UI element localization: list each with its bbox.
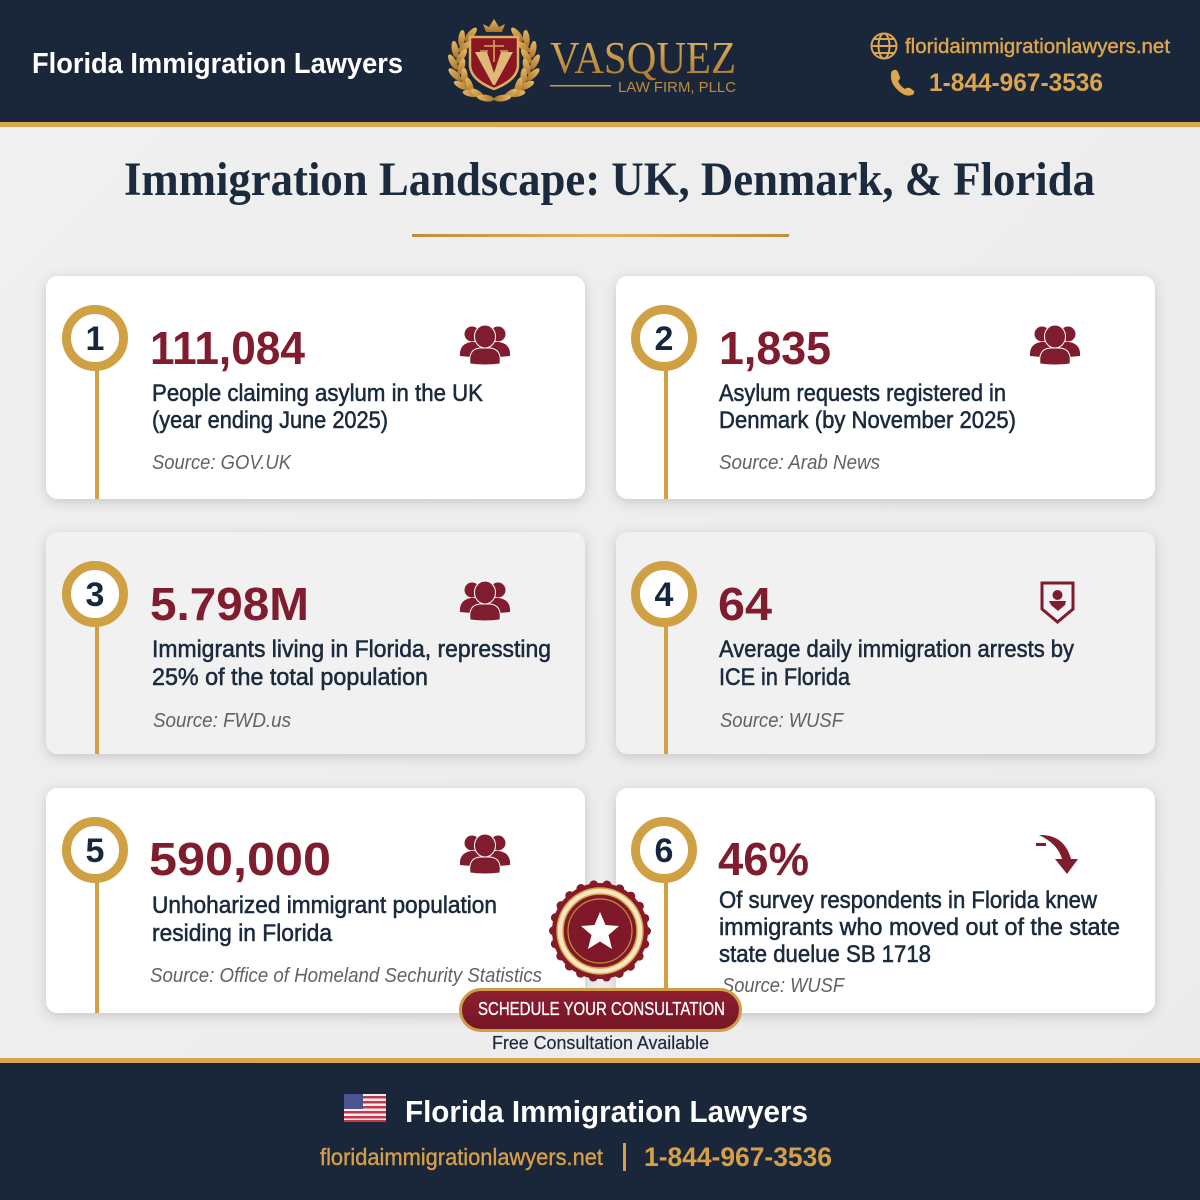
number badge 1: 1	[86, 320, 104, 358]
logo	[446, 19, 736, 103]
icon: star	[581, 912, 619, 949]
button caption: Free Consultation Available	[492, 1033, 709, 1053]
footer band	[0, 1058, 1200, 1200]
panel: stat 1	[46, 276, 585, 499]
panel: stat 2	[616, 276, 1155, 499]
panel: stat 5	[46, 788, 585, 1013]
description: Unhoharized immigrant population	[152, 892, 497, 919]
number badge 3	[66, 566, 124, 622]
number badge 5	[66, 822, 124, 878]
crown	[483, 19, 505, 32]
description: Average daily immigration arrests by	[719, 636, 1074, 663]
description: Denmark (by November 2025)	[719, 407, 1016, 434]
description: Asylum requests registered in	[719, 380, 1006, 407]
description	[152, 892, 497, 947]
description: ICE in Florida	[719, 664, 851, 691]
icon: people	[460, 581, 510, 621]
description	[719, 380, 1016, 434]
wordmark rule	[550, 85, 611, 86]
value: 590,000	[149, 833, 331, 885]
title: Immigration Landscape: UK, Denmark, & Florida	[124, 153, 1095, 206]
value: 46%	[718, 833, 809, 885]
number badge 5: 5	[86, 832, 104, 870]
icon: US flag	[344, 1094, 386, 1122]
button label: SCHEDULE YOUR CONSULTATION	[478, 999, 725, 1019]
source: Source: WUSF	[720, 710, 845, 732]
source: Source: Arab News	[719, 452, 880, 474]
footer firm name: Florida Immigration Lawyers	[405, 1094, 808, 1129]
wordmark subline: LAW FIRM, PLLC	[618, 80, 736, 96]
description: Immigrants living in Florida, repressting	[152, 636, 551, 663]
call to action button	[460, 990, 740, 1030]
icon: people	[1030, 325, 1080, 365]
description	[152, 380, 483, 434]
description: residing in Florida	[152, 920, 333, 947]
header website: floridaimmigrationlawyers.net	[905, 36, 1170, 58]
description: People claiming asylum in the UK	[152, 380, 483, 407]
footer phone: 1-844-967-3536	[644, 1142, 832, 1172]
number badge 6	[636, 822, 692, 878]
value: 1,835	[719, 322, 831, 374]
header firm name: Florida Immigration Lawyers	[32, 48, 403, 80]
description: 25% of the total population	[152, 664, 428, 691]
shield	[470, 37, 518, 89]
source: Source: Office of Homeland Sechurity Statistics	[150, 965, 542, 987]
panel: stat 4	[616, 532, 1155, 754]
icon: people	[460, 325, 510, 365]
number badge 2: 2	[655, 320, 673, 358]
icon: down arrow	[1036, 835, 1078, 874]
shield scales	[480, 40, 508, 62]
title underline	[412, 234, 789, 237]
description	[719, 636, 1074, 691]
value: 5.798M	[150, 578, 309, 630]
source: Source: FWD.us	[153, 710, 291, 732]
value: 111,084	[150, 322, 305, 374]
panel: stat 6	[616, 788, 1155, 1013]
number badge 4	[636, 566, 692, 622]
footer website: floridaimmigrationlawyers.net	[320, 1144, 604, 1170]
number badge 4: 4	[655, 576, 674, 614]
icon: shield person	[1042, 583, 1073, 622]
description	[719, 887, 1120, 968]
description: (year ending June 2025)	[152, 407, 388, 434]
wordmark: VASQUEZ	[550, 33, 736, 83]
number badge 1	[66, 310, 124, 366]
value: 64	[718, 578, 772, 630]
icon: globe	[872, 34, 896, 58]
source: Source: GOV.UK	[152, 452, 293, 474]
description	[152, 636, 551, 691]
header band	[0, 0, 1200, 127]
number badge 2	[636, 310, 692, 366]
icon: phone	[891, 70, 914, 96]
description: state duelue SB 1718	[719, 941, 931, 968]
number badge 3: 3	[86, 576, 104, 614]
seal badge	[552, 883, 648, 979]
number badge 6: 6	[655, 832, 673, 870]
source: Source: WUSF	[722, 975, 846, 997]
shield V	[475, 52, 513, 85]
laurel wreath	[446, 26, 542, 103]
description: Of survey respondents in Florida knew	[719, 887, 1098, 914]
header phone: 1-844-967-3536	[929, 69, 1103, 97]
panel: stat 3	[46, 532, 585, 754]
icon: people	[460, 834, 510, 874]
description: immigrants who moved out of the state	[719, 914, 1120, 941]
